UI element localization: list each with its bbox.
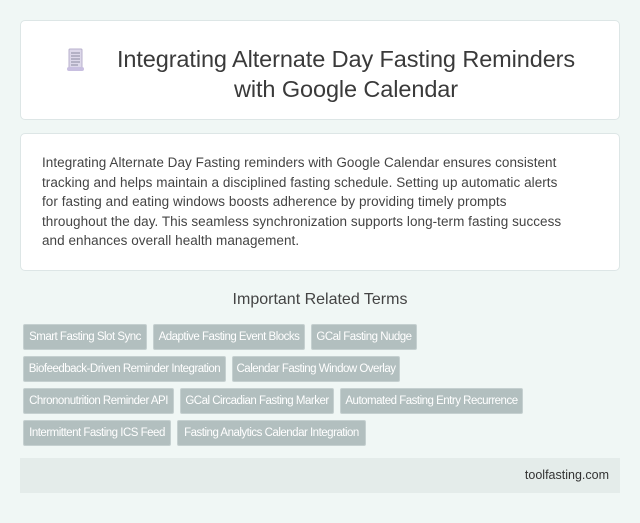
description text: for fasting and eating windows boosts adherence by providing timely prompts [42, 194, 507, 209]
tag: Chrononutrition Reminder API [29, 395, 168, 407]
tag [23, 420, 171, 446]
tag [340, 388, 523, 414]
description text: throughout the day. This seamless synchronization supports long-term fasting success [42, 214, 561, 228]
tag: GCal Circadian Fasting Marker [185, 395, 329, 407]
description text: Integrating Alternate Day Fasting reminders with Google Calendar ensures consistent [42, 155, 556, 170]
title: Integrating Alternate Day Fasting Reminders [117, 46, 575, 72]
tag [311, 324, 417, 350]
section heading: Important Related Terms [233, 291, 407, 308]
tag [180, 388, 334, 414]
tag [23, 388, 174, 414]
description text: and enhances overall health management. [42, 233, 299, 248]
header card [20, 20, 620, 120]
tag: Smart Fasting Slot Sync [29, 331, 141, 343]
title: with Google Calendar [234, 76, 458, 102]
description card [20, 133, 620, 271]
footer [20, 458, 620, 493]
title [117, 46, 575, 102]
tag: GCal Fasting Nudge [316, 331, 412, 343]
icon: document [67, 48, 84, 71]
tag: Intermittent Fasting ICS Feed [29, 427, 165, 439]
tag: Biofeedback-Driven Reminder Integration [29, 363, 220, 375]
tag [23, 356, 226, 382]
description text [42, 155, 561, 248]
tag: Adaptive Fasting Event Blocks [159, 331, 299, 343]
tag: Fasting Analytics Calendar Integration [184, 427, 359, 439]
tag [153, 324, 305, 350]
tag: Calendar Fasting Window Overlay [236, 363, 396, 375]
footer: toolfasting.com [525, 468, 609, 482]
tag: Automated Fasting Entry Recurrence [345, 395, 518, 407]
tag [177, 420, 366, 446]
tag [232, 356, 400, 382]
tag [23, 324, 147, 350]
description text: tracking and helps maintain a disciplined fasting schedule. Setting up automatic alerts [42, 174, 557, 190]
